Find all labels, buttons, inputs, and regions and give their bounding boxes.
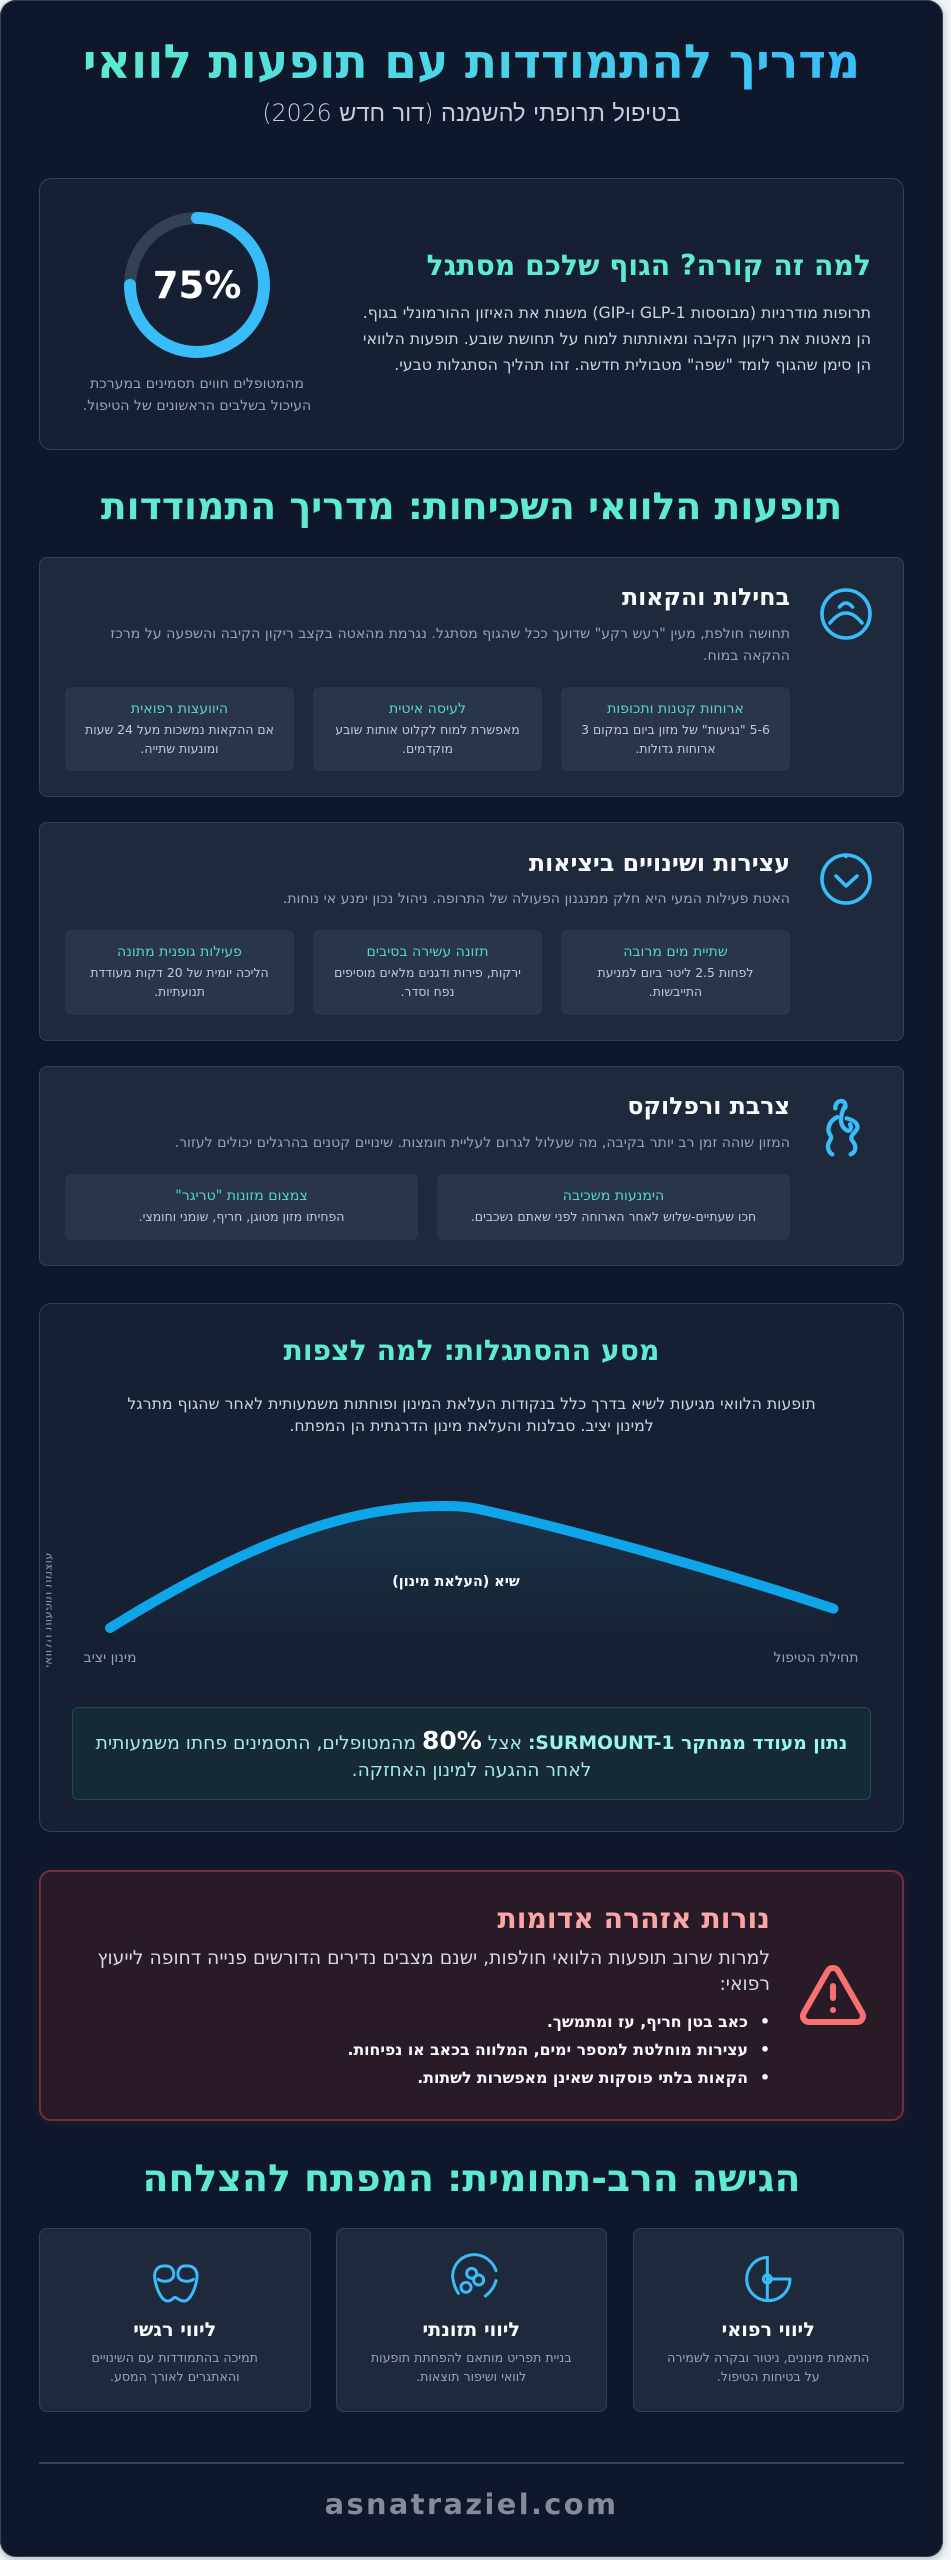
card text xyxy=(667,2350,869,2384)
chart: side effect intensity curve: תחילת הטיפול xyxy=(774,1650,858,1666)
callout: SURMOUNT-1 statistic: לאחר ההגעה למינון האחזקה. xyxy=(352,1760,591,1781)
panel: constipation xyxy=(39,822,904,1041)
tip: small meals xyxy=(561,687,790,771)
tip: slow chewing: מוקדמים. xyxy=(402,741,453,756)
panel: adaptation journey xyxy=(39,1303,904,1832)
explanation text xyxy=(363,303,871,374)
tip: reduce trigger foods: צמצום מזונות "טריגר" xyxy=(175,1188,308,1204)
chart: side effect intensity curve xyxy=(46,1501,858,1668)
tip: small meals: ארוחות קטנות ותכופות xyxy=(607,700,744,716)
panel heading: למה זה קורה? הגוף שלכם מסתגל xyxy=(426,249,871,282)
tip: avoid lying down xyxy=(437,1174,790,1240)
card title: ליווי רפואי xyxy=(722,2318,815,2341)
panel: red flags warning xyxy=(39,1870,904,2121)
chart: side effect intensity curve: שיא (העלאת מינון) xyxy=(392,1574,520,1590)
card text: לוואי ושיפור תוצאות. xyxy=(416,2369,526,2384)
icon: constipation clock xyxy=(820,853,872,905)
explanation text: תרופות מודרניות (מבוססות GLP-1 ו-GIP) משנות את האיזון ההורמונלי בגוף. xyxy=(363,303,871,322)
card text: בניית תפריט מותאם להפחתת תופעות xyxy=(371,2350,572,2365)
card title: עצירות ושינויים ביציאות xyxy=(529,849,790,877)
card text xyxy=(92,2350,258,2384)
journey description: למינון יציב. סבלנות והעלאת מינון הדרגתית הן המפתח. xyxy=(289,1416,654,1435)
icon: reflux torso xyxy=(826,1098,860,1156)
card: medical support xyxy=(632,2228,904,2412)
card description xyxy=(110,626,790,664)
tip: fiber: נפח וסדר. xyxy=(400,984,455,999)
tip: small meals: 5-6 "נגיעות" של מזון ביום במקום 3 xyxy=(581,722,770,736)
tip: drink water: לפחות 2.5 ליטר ביום למניעת xyxy=(598,964,753,980)
card text xyxy=(371,2350,572,2384)
tip: activity xyxy=(65,930,294,1015)
icon: nutrition circles xyxy=(451,2253,498,2298)
journey description: תופעות הלוואי מגיעות לשיא בדרך כלל בנקודות העלאת המינון ופוחתות משמעותית לאחר שהגוף מתרגל xyxy=(127,1394,816,1413)
card text: והאתגרים לאורך המסע. xyxy=(110,2369,240,2384)
footer: website: asnatraziel.com xyxy=(325,2487,618,2521)
tip: fiber: תזונה עשירה בסיבים xyxy=(366,944,488,960)
heading: common side effects: תופעות הלוואי השכיחות: מדריך התמודדות xyxy=(101,484,842,528)
warning list: • xyxy=(760,2012,770,2031)
card text: תמיכה בהתמודדות עם השינויים xyxy=(92,2350,258,2365)
donut caption: מהמטופלים חווים תסמינים במערכת xyxy=(90,376,304,392)
tip: activity: תנועתיות. xyxy=(154,984,205,999)
tip: drink water: שתיית מים מרובה xyxy=(623,944,728,960)
card title: ליווי רגשי xyxy=(133,2318,216,2341)
tip: medical advice xyxy=(65,687,294,771)
warning list: כאב בטן חריף, עז ומתמשך. xyxy=(547,2012,748,2031)
tip: drink water xyxy=(561,930,790,1015)
card description: המזון שוהה זמן רב יותר בקיבה, מה שעלול לגרום לעליית חומצות. שינויים קטנים בהרגלים יכולים לעזור. xyxy=(175,1135,790,1151)
warning intro: רפואי: xyxy=(719,1974,770,1995)
icon: warning triangle xyxy=(800,1965,866,2025)
tip: slow chewing: מאפשרת למוח לקלוט אותות שובע xyxy=(335,722,520,736)
donut chart: 75%: 75% xyxy=(153,264,241,307)
card description: האטת פעילות המעי היא חלק ממנגנון הפעולה של התרופה. ניהול נכון ימנע אי נוחות. xyxy=(283,891,790,907)
callout: SURMOUNT-1 statistic xyxy=(72,1707,871,1800)
warning list xyxy=(348,2012,770,2087)
card title: ליווי תזונתי xyxy=(422,2318,520,2341)
tip: reduce trigger foods: הפחיתו מזון מטוגן, חריף, שומני וחומצי. xyxy=(139,1208,344,1224)
tip: medical advice: אם ההקאות נמשכות מעל 24 שעות xyxy=(85,722,274,736)
icon: emotional mask xyxy=(153,2264,199,2302)
tip: fiber xyxy=(313,930,542,1015)
tip: drink water: התייבשות. xyxy=(649,984,702,999)
tip: fiber: ירקות, פירות ודגנים מלאים מוסיפים xyxy=(334,964,521,980)
warning heading: נורות אזהרה אדומות xyxy=(497,1902,770,1935)
warning list: • xyxy=(760,2068,770,2087)
donut caption: העיכול בשלבים הראשונים של הטיפול. xyxy=(83,398,311,414)
explanation text: הן סימן שהגוף לומד "שפה" מטבולית חדשה. זהו תהליך הסתגלות טבעי. xyxy=(394,355,871,374)
card: nutrition support xyxy=(336,2228,607,2412)
card title: צרבת ורפלוקס xyxy=(627,1092,790,1120)
card description: ההקאה במוח. xyxy=(703,648,790,664)
warning list: • xyxy=(760,2040,770,2059)
subtitle: בטיפול תרופתי להשמנה (דור חדש 2026) xyxy=(262,99,681,127)
tip: small meals: ארוחות גדולות. xyxy=(635,741,716,756)
journey heading: מסע ההסתגלות: למה לצפות xyxy=(284,1334,659,1367)
explanation text: הן מאטות את ריקון הקיבה ומאותתות למוח על תחושת שובע. תופעות הלוואי xyxy=(363,329,871,348)
chart: side effect intensity curve: מינון יציב xyxy=(84,1650,136,1666)
warning list: הקאות בלתי פוסקות שאינן מאפשרות לשתות. xyxy=(417,2068,748,2087)
heading: multidisciplinary approach: הגישה הרב-תחומית: המפתח להצלחה xyxy=(142,2156,800,2200)
donut chart: 75% xyxy=(124,212,270,358)
title: מדריך להתמודדות עם תופעות לוואי xyxy=(83,35,860,90)
card: emotional support xyxy=(39,2228,310,2412)
tip: slow chewing: לעיסה איטית xyxy=(389,700,466,716)
tip: medical advice: ומונעות שתייה. xyxy=(140,741,219,756)
card text: על בטיחות הטיפול. xyxy=(717,2369,820,2384)
tip: avoid lying down: הימנעות משכיבה xyxy=(563,1188,664,1204)
panel: nausea and vomiting xyxy=(39,557,904,797)
warning intro: למרות שרוב תופעות הלוואי חולפות, ישנם מצבים נדירים הדורשים פנייה דחופה לייעוץ xyxy=(97,1948,770,1969)
donut caption xyxy=(83,376,311,414)
warning list: עצירות מוחלטת למספר ימים, המלווה בכאב או נפיחות. xyxy=(348,2040,748,2059)
tip: activity: פעילות גופנית מתונה xyxy=(117,944,242,960)
panel: heartburn and reflux xyxy=(39,1066,904,1266)
warning intro xyxy=(97,1948,770,1995)
journey description xyxy=(127,1394,816,1435)
tip: medical advice: היוועצות רפואית xyxy=(131,700,228,716)
icon: medical pie xyxy=(745,2256,792,2302)
tip: avoid lying down: חכו שעתיים-שלוש לאחר הארוחה לפני שאתם נשכבים. xyxy=(471,1208,756,1224)
tip: slow chewing xyxy=(313,687,542,771)
card description: תחושה חולפת, מעין "רעש רקע" שדועך ככל שהגוף מסתגל. נגרמת מהאטה בקצב ריקון הקיבה והשפעה על מרכז xyxy=(110,626,790,642)
callout: SURMOUNT-1 statistic: נתון מעודד ממחקר SURMOUNT-1: אצל 80% מהמטופלים, התסמינים פחתו משמעותית xyxy=(96,1726,847,1755)
panel: why it happens xyxy=(39,178,904,450)
card text: התאמת מינונים, ניטור ובקרה לשמירה xyxy=(667,2350,869,2365)
card title: בחילות והקאות xyxy=(622,583,790,611)
tip: reduce trigger foods xyxy=(65,1174,418,1240)
icon: nausea face xyxy=(820,588,872,640)
tip: activity: הליכה יומית של 20 דקות מעודדת xyxy=(90,964,269,980)
